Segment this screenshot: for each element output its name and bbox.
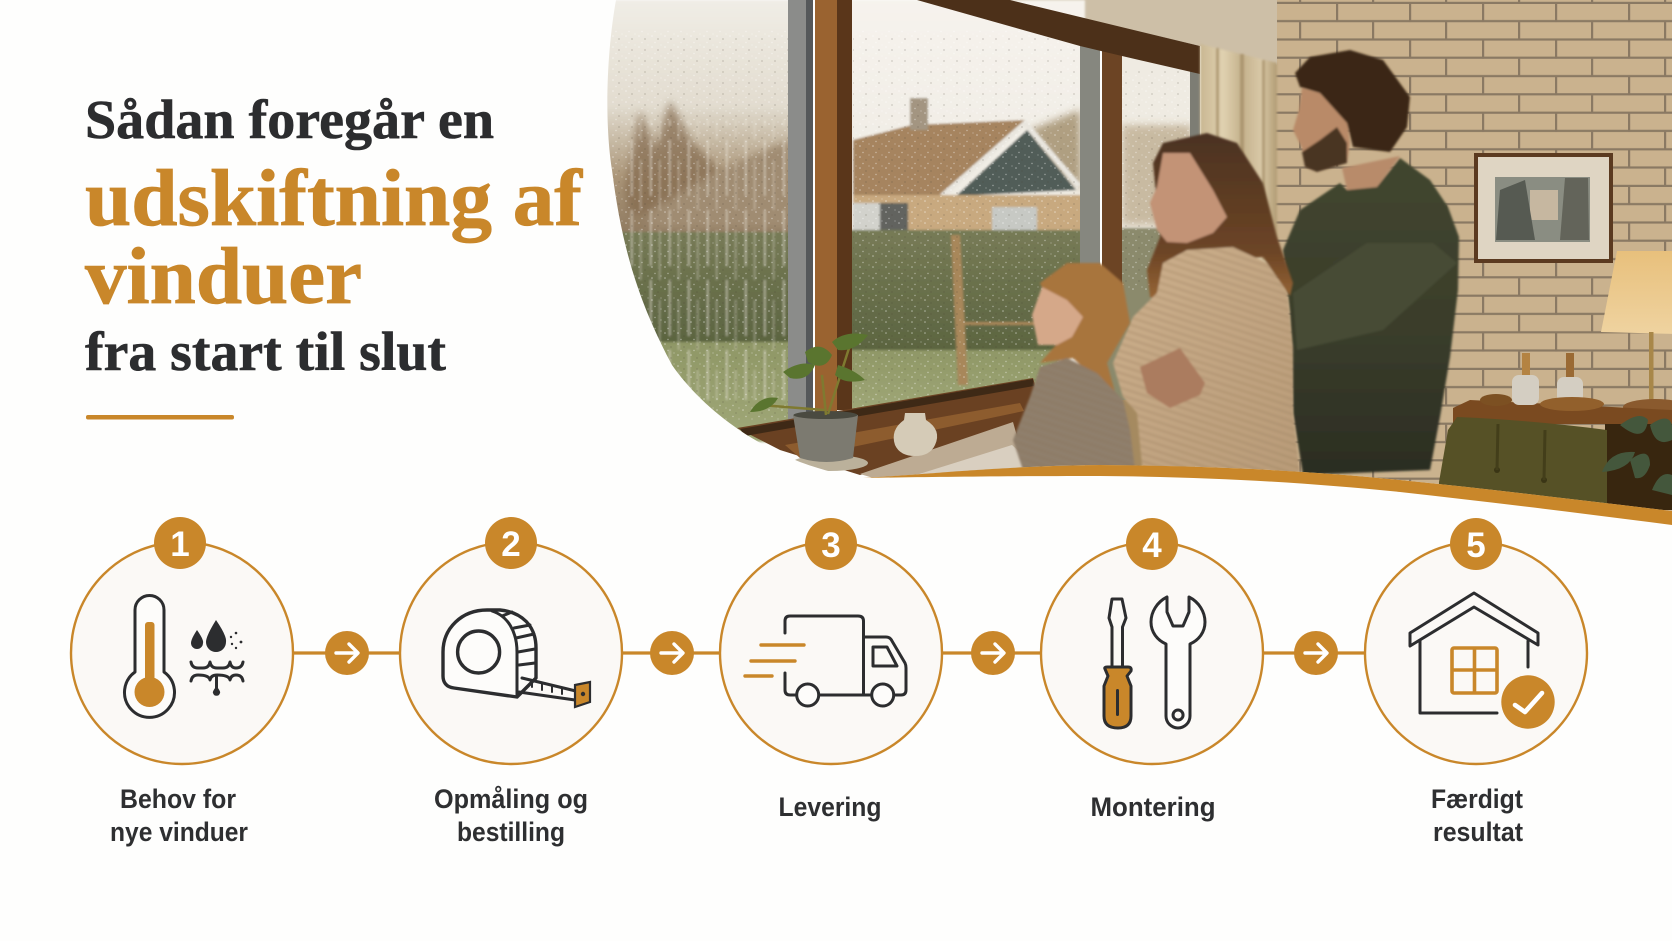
- girl: [1013, 263, 1135, 470]
- badge 1: [154, 517, 206, 569]
- badge 2: 2: [501, 525, 521, 564]
- label 5: [1431, 784, 1523, 847]
- right window pane: [1122, 56, 1190, 295]
- room plant: [1602, 416, 1672, 495]
- picture frame: [1474, 153, 1613, 263]
- photo: family looking at rainy window: [600, 0, 1672, 540]
- badge 3: [805, 518, 857, 570]
- step 2: [400, 517, 622, 847]
- label 5: resultat: [1433, 817, 1523, 847]
- step 5: [1365, 518, 1587, 847]
- window frame: [737, 0, 1200, 480]
- title highlight line 2: vinduer: [85, 233, 362, 321]
- step 1: [71, 517, 293, 847]
- label 3: Levering: [778, 792, 882, 822]
- title line 4: fra start til slut: [85, 321, 447, 382]
- badge 1: 1: [170, 525, 190, 564]
- icon: house with window: [1410, 593, 1538, 713]
- gold wave: [863, 465, 1672, 525]
- arrow 2: [650, 631, 694, 675]
- curtain: [1200, 44, 1277, 280]
- title: [85, 89, 583, 382]
- arrow 4: [1294, 631, 1338, 675]
- circle 2: [400, 542, 622, 764]
- man sweater: [1283, 158, 1459, 475]
- woman: [1113, 133, 1300, 475]
- circle 1: [71, 542, 293, 764]
- arrow 3: [971, 631, 1015, 675]
- icon: moisture and drops: [191, 620, 243, 696]
- icon: check badge: [1501, 675, 1555, 729]
- label 5: Færdigt: [1431, 784, 1523, 814]
- title highlight line 1: udskiftning af: [85, 155, 583, 243]
- connector lines: [292, 651, 1366, 655]
- arrow 1: [325, 631, 369, 675]
- man: [1283, 50, 1459, 475]
- rain drops: [612, 30, 788, 420]
- badge 4: [1126, 518, 1178, 570]
- lamp: [1601, 251, 1672, 415]
- room behind people: [1085, 295, 1195, 480]
- left window pane: [600, 0, 790, 442]
- centre window pane: [850, 0, 1085, 420]
- circle 4: [1041, 542, 1263, 764]
- icon: delivery truck: [745, 616, 906, 706]
- plant in pot: [750, 334, 868, 471]
- label 2: bestilling: [457, 817, 565, 847]
- badge 5: 5: [1466, 526, 1486, 565]
- icon: thermometer: [124, 596, 174, 717]
- woman hair: [1147, 133, 1293, 305]
- step 4: [1041, 518, 1263, 822]
- sideboard with candles: [1453, 353, 1672, 510]
- label 1: [110, 784, 248, 847]
- title underline: [86, 415, 234, 420]
- badge 4: 4: [1142, 526, 1162, 565]
- icon: screwdriver: [1104, 599, 1131, 728]
- brick wall: [1275, 0, 1672, 540]
- title line 1: Sådan foregår en: [85, 89, 494, 150]
- icon: wrench: [1151, 597, 1205, 728]
- badge 2: [485, 517, 537, 569]
- circle 5: [1365, 542, 1587, 764]
- circle 3: [720, 542, 942, 764]
- ceiling wall: [1005, 0, 1277, 65]
- badge 3: 3: [821, 526, 841, 565]
- badge 5: [1450, 518, 1502, 570]
- icon: tape measure: [443, 610, 590, 707]
- label 1: nye vinduer: [110, 817, 248, 847]
- woman sweater: [1113, 247, 1300, 475]
- label 2: [434, 784, 588, 847]
- label 1: Behov for: [120, 784, 236, 814]
- step 3: [720, 518, 942, 822]
- vase: [894, 413, 937, 456]
- label 4: Montering: [1090, 792, 1216, 822]
- armchair: [1439, 417, 1607, 505]
- label 2: Opmåling og: [434, 784, 588, 814]
